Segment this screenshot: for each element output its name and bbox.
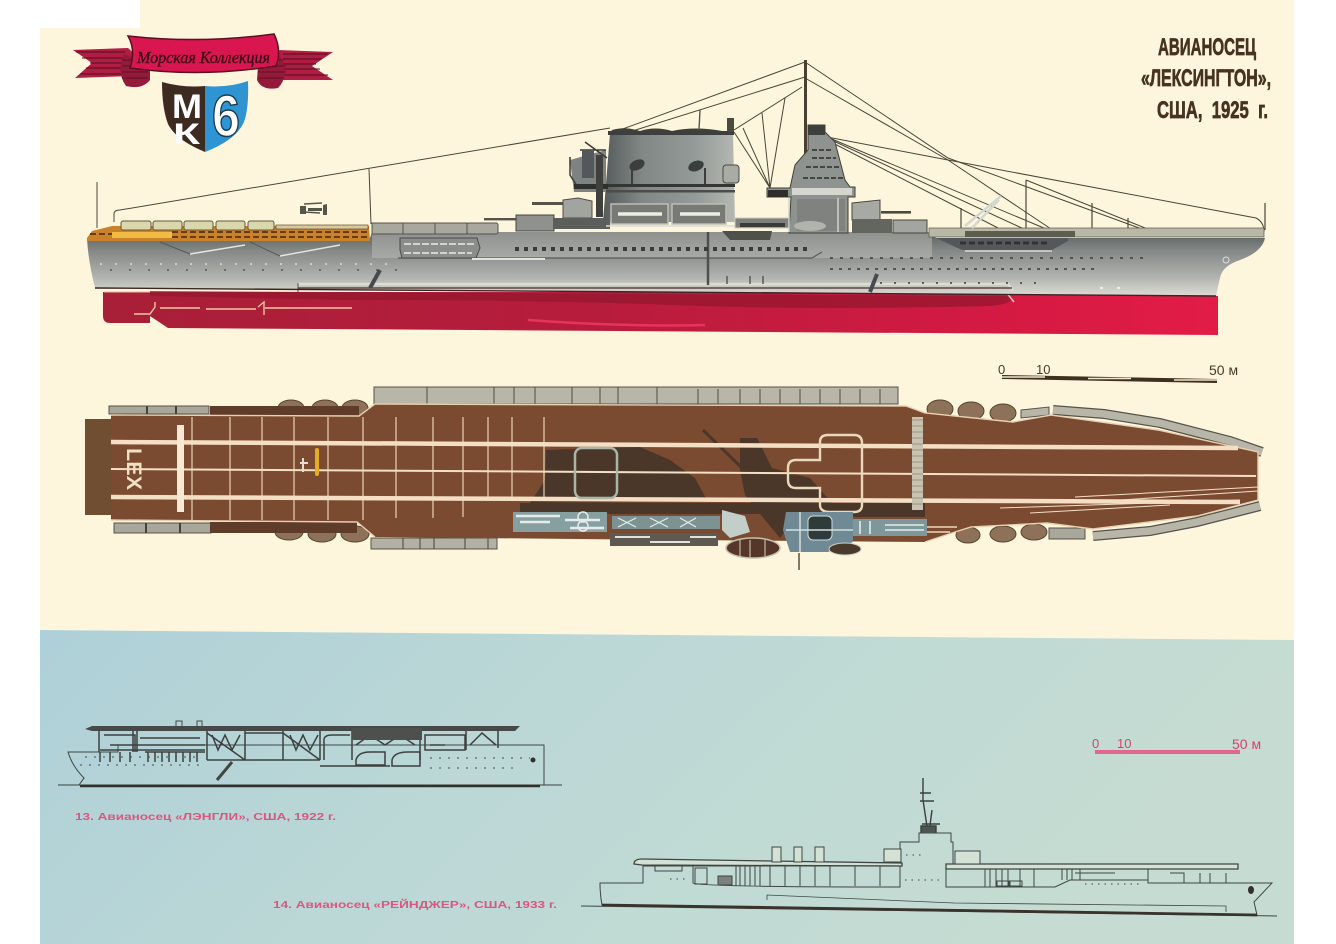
mast: [920, 778, 940, 833]
hatched elevator bay: [352, 728, 422, 740]
stern crossbar: [177, 425, 184, 512]
deck surface: [111, 404, 1258, 542]
shield МК 6: М: [172, 88, 202, 126]
title: [1141, 34, 1271, 124]
scale bar: blue: 50 м: [1232, 736, 1261, 752]
midships boats under funnel deck: [722, 218, 790, 240]
small aircraft from above: [300, 448, 319, 476]
dotted portholes: [670, 855, 1140, 884]
logo: Морская Коллекция: [73, 34, 333, 152]
flight deck aft: [634, 859, 902, 866]
scale bar: blue: 10: [1117, 736, 1131, 751]
aft gun turrets: [484, 198, 610, 231]
ribbon: [73, 34, 333, 89]
forward elevator: [788, 435, 862, 512]
casemate opening: [400, 238, 480, 258]
LEX deck letters: LEX: [122, 448, 145, 490]
hull: [600, 833, 1272, 915]
crane: [965, 196, 1001, 228]
boat recess forward: [936, 238, 1068, 250]
funnels: [772, 847, 824, 862]
title: «ЛЕКСИНГТОН»,: [1141, 65, 1271, 92]
caption: Langley: 13. Авианосец «ЛЭНГЛИ», США, 1922 г.: [75, 811, 336, 823]
scale bar: blue: 0: [1092, 736, 1099, 751]
funnel: [603, 110, 739, 226]
funnel caps: [176, 721, 202, 726]
flight deck: [85, 726, 520, 731]
superstructure from above: [513, 510, 957, 570]
shield МК 6: 6: [212, 84, 240, 149]
shield МК 6: [162, 81, 248, 152]
cream paper panel: [40, 0, 1294, 640]
deck girders: [99, 731, 498, 766]
portholes: [80, 757, 530, 768]
armour belt: [767, 895, 1226, 912]
mast: [804, 60, 807, 172]
aft platform: [570, 142, 608, 217]
side view: USS Lexington: [87, 60, 1265, 335]
small ship: Langley: [58, 721, 562, 786]
hull outline: [68, 745, 544, 785]
title: США, 1925 г.: [1157, 97, 1268, 124]
scale bar: cream: 0: [998, 362, 1005, 377]
waterline: [58, 784, 562, 786]
aft elevator: [575, 448, 617, 498]
script title: Морская Коллекция: [136, 48, 270, 67]
anchor gear: [217, 762, 232, 780]
caption: Ranger: 14. Авианосец «РЕЙНДЖЕР», США, 1933 г.: [273, 898, 557, 911]
small ship: Ranger: [581, 778, 1277, 916]
scale bar: cream: 50 м: [1209, 362, 1238, 378]
waterline: [581, 906, 1277, 916]
red underwater hull: [103, 291, 1218, 335]
stern deck (orange): [87, 221, 370, 241]
anchors and hawse: [370, 270, 380, 288]
hawse: [1248, 886, 1254, 894]
plan view: flight deck: [85, 387, 1262, 570]
scale bar: cream: [998, 362, 1238, 381]
stern overhang: [85, 419, 111, 515]
forward gun turrets: [852, 200, 927, 233]
deck stripes: [111, 417, 1258, 520]
crash barrier: [912, 417, 923, 510]
aft hangar section: [655, 866, 900, 887]
island superstructure: [767, 125, 855, 233]
island side boxes: [884, 849, 980, 864]
deck outline: [111, 404, 1258, 542]
rigging and antennas: [97, 62, 1265, 236]
island shadows: [520, 430, 925, 538]
flight deck forward: [946, 864, 1238, 869]
shield МК 6: К: [173, 118, 201, 151]
aircraft: [300, 203, 327, 215]
sponsons: [109, 387, 1262, 549]
forward deck rail: [929, 228, 1264, 237]
title: АВИАНОСЕЦ: [1158, 34, 1256, 61]
forward hangar section: [946, 869, 1226, 887]
rows of portholes: [100, 249, 1150, 288]
scale bar: blue: [1092, 736, 1261, 754]
grey hull: [87, 232, 1265, 296]
scale bar: cream: 10: [1036, 362, 1050, 377]
sponson boats midships: [372, 223, 498, 234]
blue lower panel: [40, 630, 1294, 944]
